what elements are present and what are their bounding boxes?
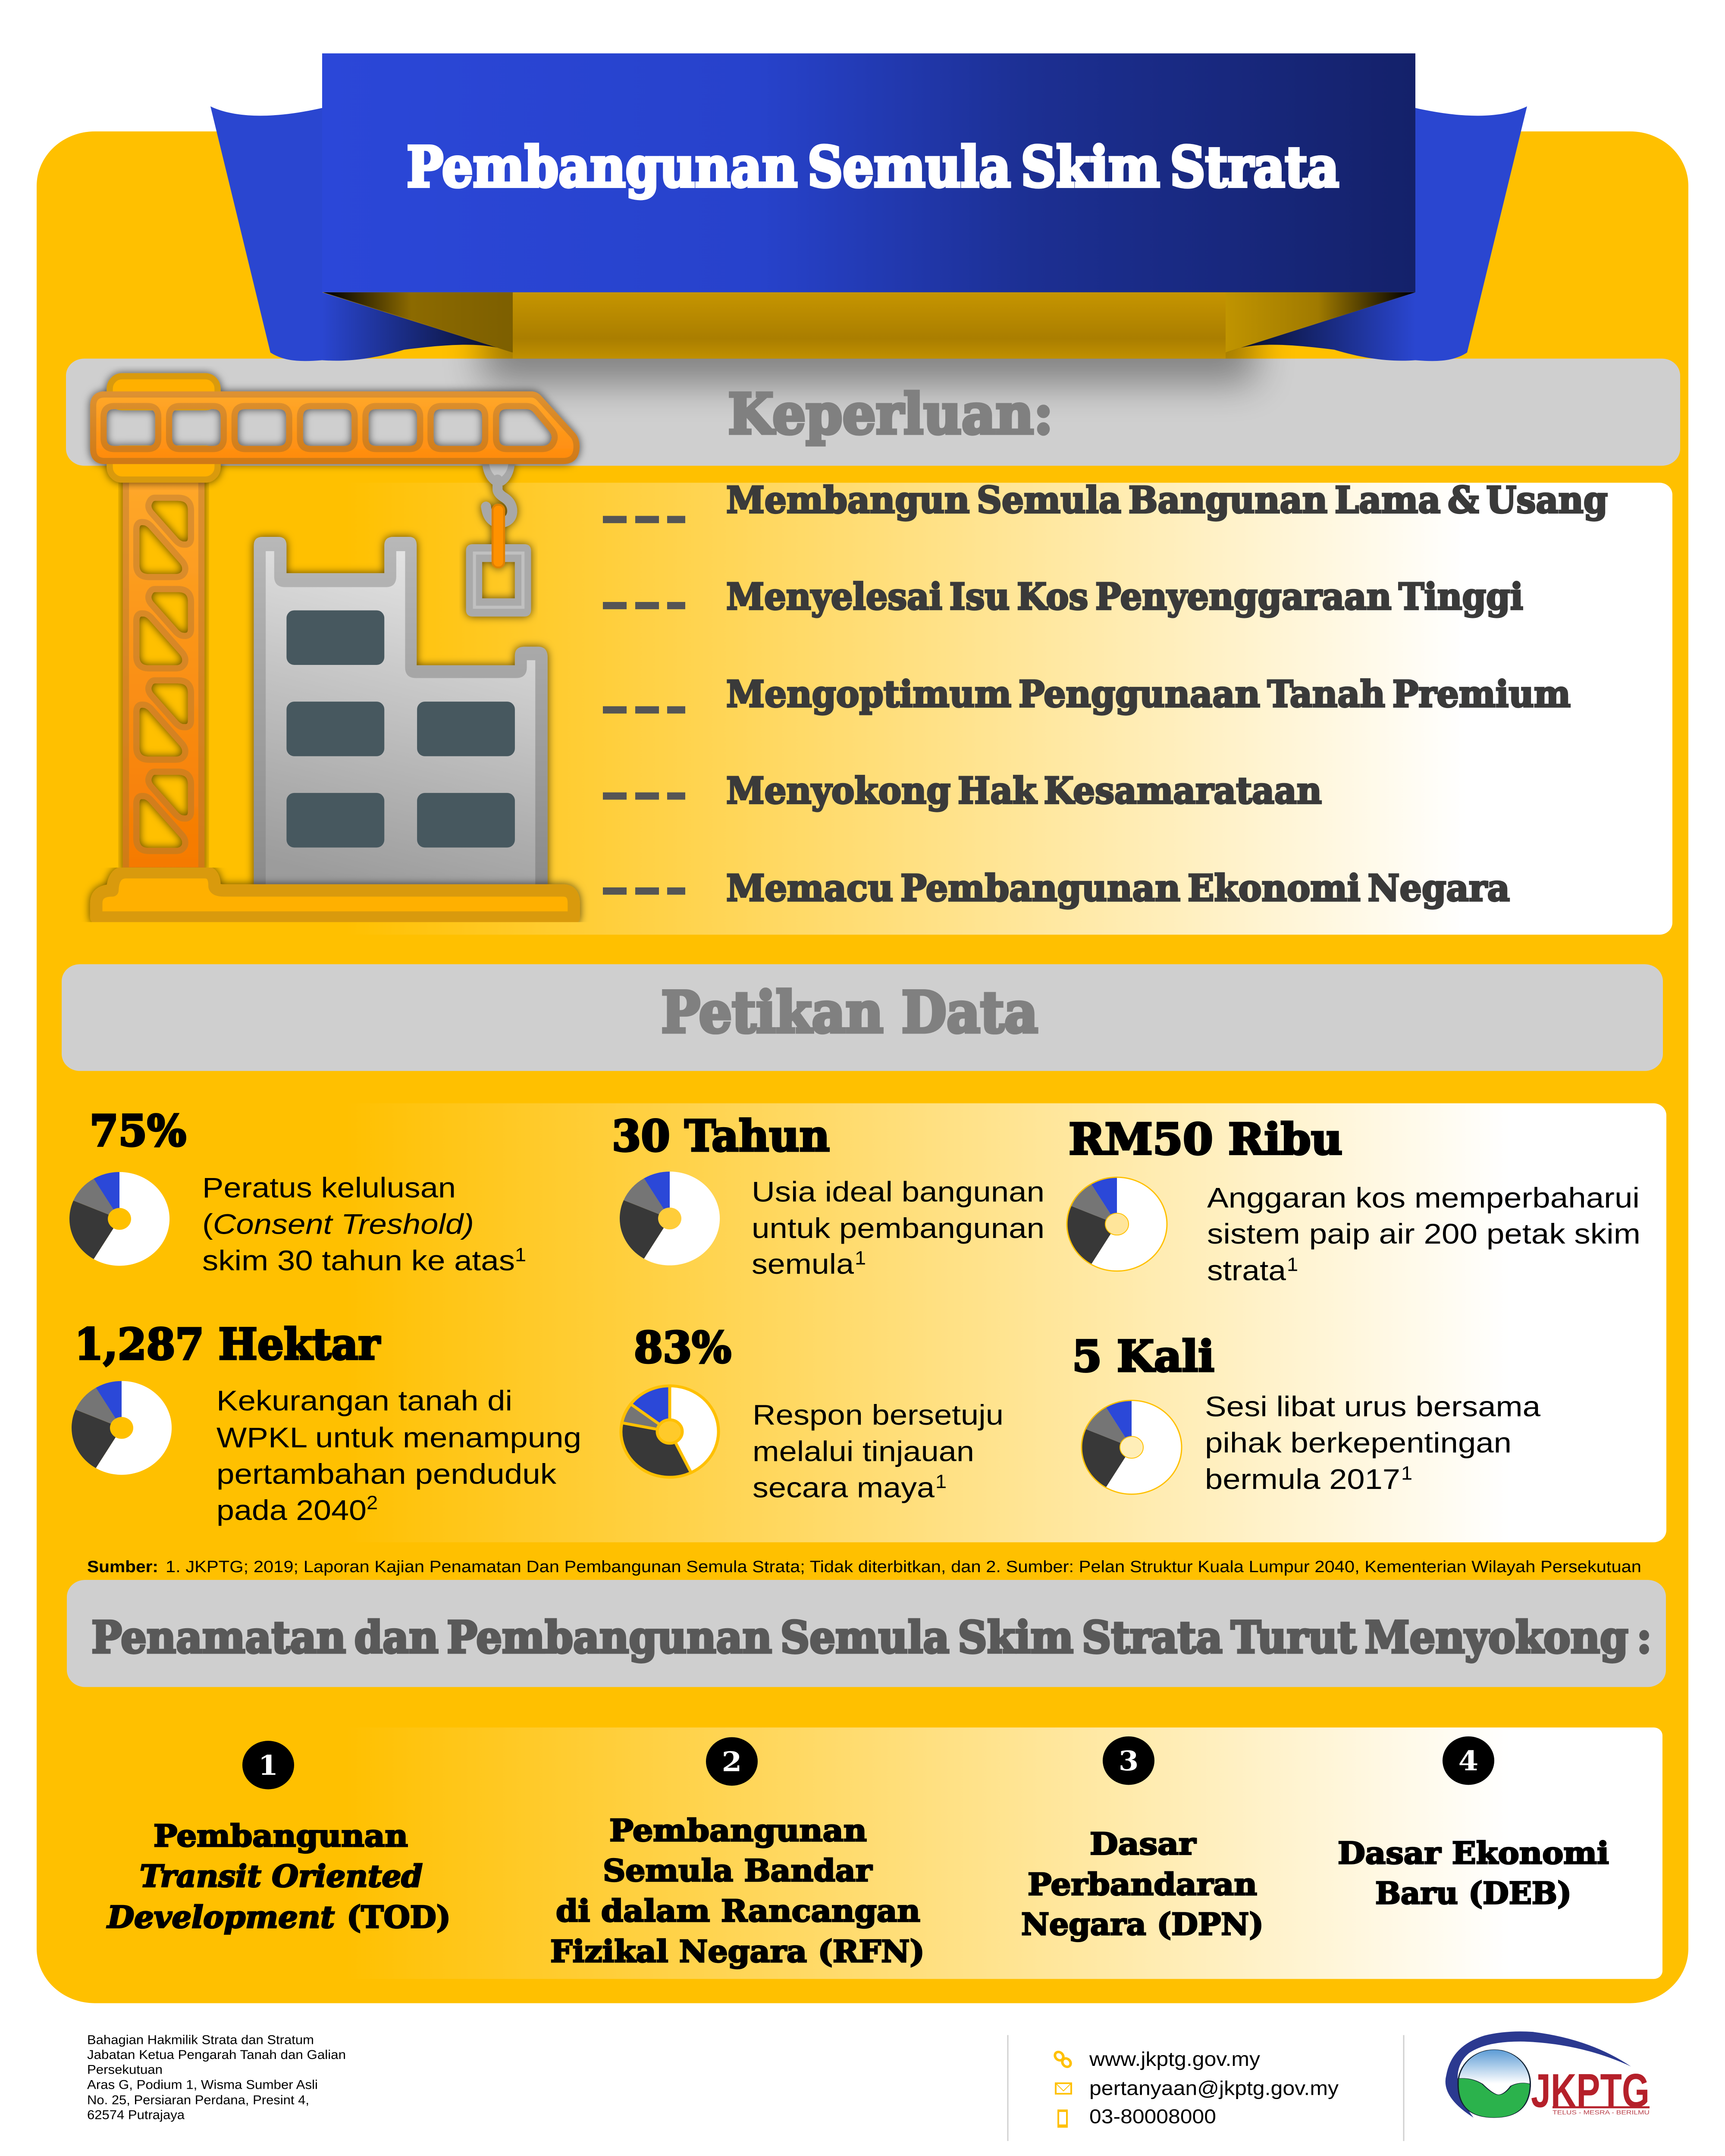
footer dividers <box>1008 2035 1404 2141</box>
description: bermula 2017 <box>1205 1464 1400 1495</box>
panel: Keperluan heading bar <box>66 359 1680 466</box>
icon: mail <box>1056 2083 1071 2094</box>
item 5: Memacu Pembangunan Ekonomi Negara <box>726 867 1510 909</box>
source note: Sumber: <box>87 1557 158 1576</box>
footer address: Aras G, Podium 1, Wisma Sumber Asli <box>87 2077 318 2092</box>
hook and load <box>466 464 531 617</box>
pie chart <box>621 1386 718 1477</box>
panel: supporting policies background <box>65 1727 1662 1979</box>
policy text: Fizikal Negara (RFN) <box>550 1934 925 1969</box>
stat: RM50 Ribu <box>1067 1115 1640 1287</box>
description: pada 2040 <box>216 1495 367 1526</box>
heading: Petikan Data: Petikan Data <box>661 980 1038 1046</box>
stat: 5 Kali <box>1072 1332 1540 1495</box>
description: 1 <box>515 1244 526 1266</box>
number badge <box>706 1737 758 1786</box>
description: WPKL untuk menampung <box>216 1422 581 1454</box>
dashes 1 <box>603 516 685 523</box>
heading: Keperluan: Keperluan: <box>728 382 1053 447</box>
stat: 83% <box>621 1323 1004 1504</box>
description <box>216 1385 581 1526</box>
footer address: Bahagian Hakmilik Strata dan Stratum <box>87 2032 314 2047</box>
number: 1,287 Hektar <box>75 1319 381 1369</box>
logo: JKPTG <box>1446 2031 1650 2118</box>
policy 3: DPN <box>1021 1736 1264 1943</box>
description: untuk pembangunan <box>752 1213 1044 1244</box>
panel: Keperluan list background <box>65 483 1672 935</box>
item 1: Membangun Semula Bangunan Lama & Usang <box>726 479 1608 521</box>
pie chart <box>1067 1177 1167 1271</box>
policy text: Transit Oriented <box>140 1859 423 1894</box>
icon: link <box>1053 2050 1073 2068</box>
number: 30 Tahun <box>612 1111 830 1161</box>
description: melalui tinjauan <box>753 1436 974 1467</box>
illustration: crane and building <box>93 376 577 918</box>
banner shadow <box>483 307 1255 384</box>
policy 4: DEB <box>1338 1736 1609 1911</box>
footer address: Jabatan Ketua Pengarah Tanah dan Galian <box>87 2047 346 2062</box>
banner <box>322 53 1415 292</box>
stat: 75% <box>69 1106 526 1276</box>
policy text: di dalam Rancangan <box>556 1893 920 1929</box>
description: Respon bersetuju <box>753 1400 1004 1431</box>
logo emblem <box>1446 2031 1631 2118</box>
dashes 4 <box>603 793 685 799</box>
policy 1: TOD <box>107 1741 451 1935</box>
ribbon fold: left <box>323 292 513 353</box>
description: Kekurangan tanah di <box>216 1385 512 1417</box>
pie chart <box>69 1172 169 1266</box>
policy text <box>107 1818 451 1935</box>
description: 1 <box>935 1471 947 1492</box>
panel: data stats background <box>65 1103 1666 1542</box>
item 3: Mengoptimum Penggunaan Tanah Premium <box>726 673 1571 715</box>
phone number: 03-80008000 <box>1089 2106 1216 2128</box>
number badge: 3 <box>1119 1745 1138 1777</box>
number: 5 Kali <box>1072 1332 1214 1382</box>
description: 1 <box>1287 1254 1298 1275</box>
number badge <box>242 1741 294 1789</box>
description: Usia ideal bangunan <box>752 1176 1044 1208</box>
description: Anggaran kos memperbaharui <box>1207 1182 1640 1214</box>
number badge: 2 <box>722 1746 742 1778</box>
description <box>1205 1391 1540 1495</box>
description: Peratus kelulusan <box>202 1172 456 1204</box>
policy text <box>550 1813 925 1969</box>
policy text: Dasar Ekonomi <box>1338 1836 1609 1871</box>
description <box>752 1176 1044 1280</box>
policy text: Negara (DPN) <box>1021 1907 1264 1943</box>
email: pertanyaan@jkptg.gov.my <box>1089 2078 1339 2100</box>
description: pertambahan penduduk <box>216 1459 557 1490</box>
description: secara maya <box>753 1473 935 1504</box>
building <box>254 537 548 888</box>
stat: 30 Tahun <box>612 1111 1044 1280</box>
policy text <box>1338 1836 1609 1911</box>
policy text: Perbandaran <box>1028 1867 1257 1902</box>
policy text: Pembangunan <box>609 1813 867 1849</box>
footer address: Persekutuan <box>87 2062 163 2077</box>
website: www.jkptg.gov.my <box>1089 2048 1260 2071</box>
number badge <box>1443 1736 1494 1785</box>
crane base <box>96 872 574 918</box>
ribbon: right tail <box>1226 107 1527 361</box>
policy text: Pembangunan <box>154 1818 408 1854</box>
description <box>202 1172 526 1276</box>
footer address: No. 25, Persiaran Perdana, Presint 4, <box>87 2093 309 2107</box>
number: 75% <box>90 1106 186 1156</box>
description: 2 <box>367 1492 378 1514</box>
policy text: (TOD) <box>347 1899 451 1935</box>
description <box>1207 1182 1640 1287</box>
item 2: Menyelesai Isu Kos Penyenggaraan Tinggi <box>726 575 1523 618</box>
number: RM50 Ribu <box>1069 1115 1342 1165</box>
description: sistem paip air 200 petak skim <box>1207 1219 1640 1250</box>
crane collars and jib <box>93 376 577 479</box>
dashes 2 <box>603 602 685 609</box>
logo wordmark: JKPTG <box>1531 2064 1650 2118</box>
footer address: 62574 Putrajaya <box>87 2108 185 2122</box>
policy text: Development <box>107 1899 335 1935</box>
icon: phone <box>1058 2110 1067 2127</box>
title: Pembangunan Semula Skim Strata <box>407 135 1339 200</box>
banner underside <box>513 292 1226 359</box>
number badge: 4 <box>1458 1745 1478 1777</box>
logo tagline: TELUS - MESRA - BERILMU <box>1552 2109 1650 2116</box>
number badge <box>1103 1736 1154 1785</box>
pie chart <box>72 1381 172 1475</box>
stat: 1,287 Hektar <box>72 1319 581 1526</box>
number: 83% <box>634 1323 731 1373</box>
panel: Petikan Data heading bar <box>62 964 1663 1071</box>
description: semula <box>752 1249 854 1280</box>
description: Sesi libat urus bersama <box>1205 1391 1540 1423</box>
crane mast <box>126 479 201 870</box>
description: strata <box>1207 1255 1286 1287</box>
description: 1 <box>855 1247 866 1269</box>
footer address <box>87 2032 346 2122</box>
pie chart <box>620 1172 720 1266</box>
dashes 5 <box>603 887 685 895</box>
item 4: Menyokong Hak Kesamarataan <box>726 769 1322 812</box>
description <box>753 1400 1004 1504</box>
list: Keperluan items <box>603 479 1608 909</box>
number badge: 1 <box>258 1750 278 1781</box>
description: (Consent Treshold) <box>202 1209 474 1240</box>
logo rule <box>1552 2106 1650 2108</box>
ribbon: left tail <box>210 107 513 361</box>
dashes 3 <box>603 706 685 714</box>
description: skim 30 tahun ke atas <box>202 1245 515 1276</box>
policy text: Dasar <box>1090 1827 1197 1862</box>
pie chart <box>1082 1401 1182 1494</box>
source note: 1. JKPTG; 2019; Laporan Kajian Penamatan Dan Pembangunan Semula Strata; Tidak diterbitkan, dan 2. Sumber: Pelan Struktur Kuala Lumpur 2040, Kementerian Wilayah Persekutuan <box>166 1557 1641 1576</box>
policy text: Baru (DEB) <box>1375 1876 1571 1911</box>
policy text <box>1021 1827 1264 1943</box>
policy text: Semula Bandar <box>603 1853 873 1889</box>
description: pihak berkepentingan <box>1205 1428 1512 1459</box>
ribbon fold: right <box>1226 292 1415 353</box>
policy 2: RFN <box>550 1737 925 1969</box>
description: 1 <box>1401 1463 1412 1484</box>
panel: Penamatan heading bar <box>67 1580 1666 1687</box>
